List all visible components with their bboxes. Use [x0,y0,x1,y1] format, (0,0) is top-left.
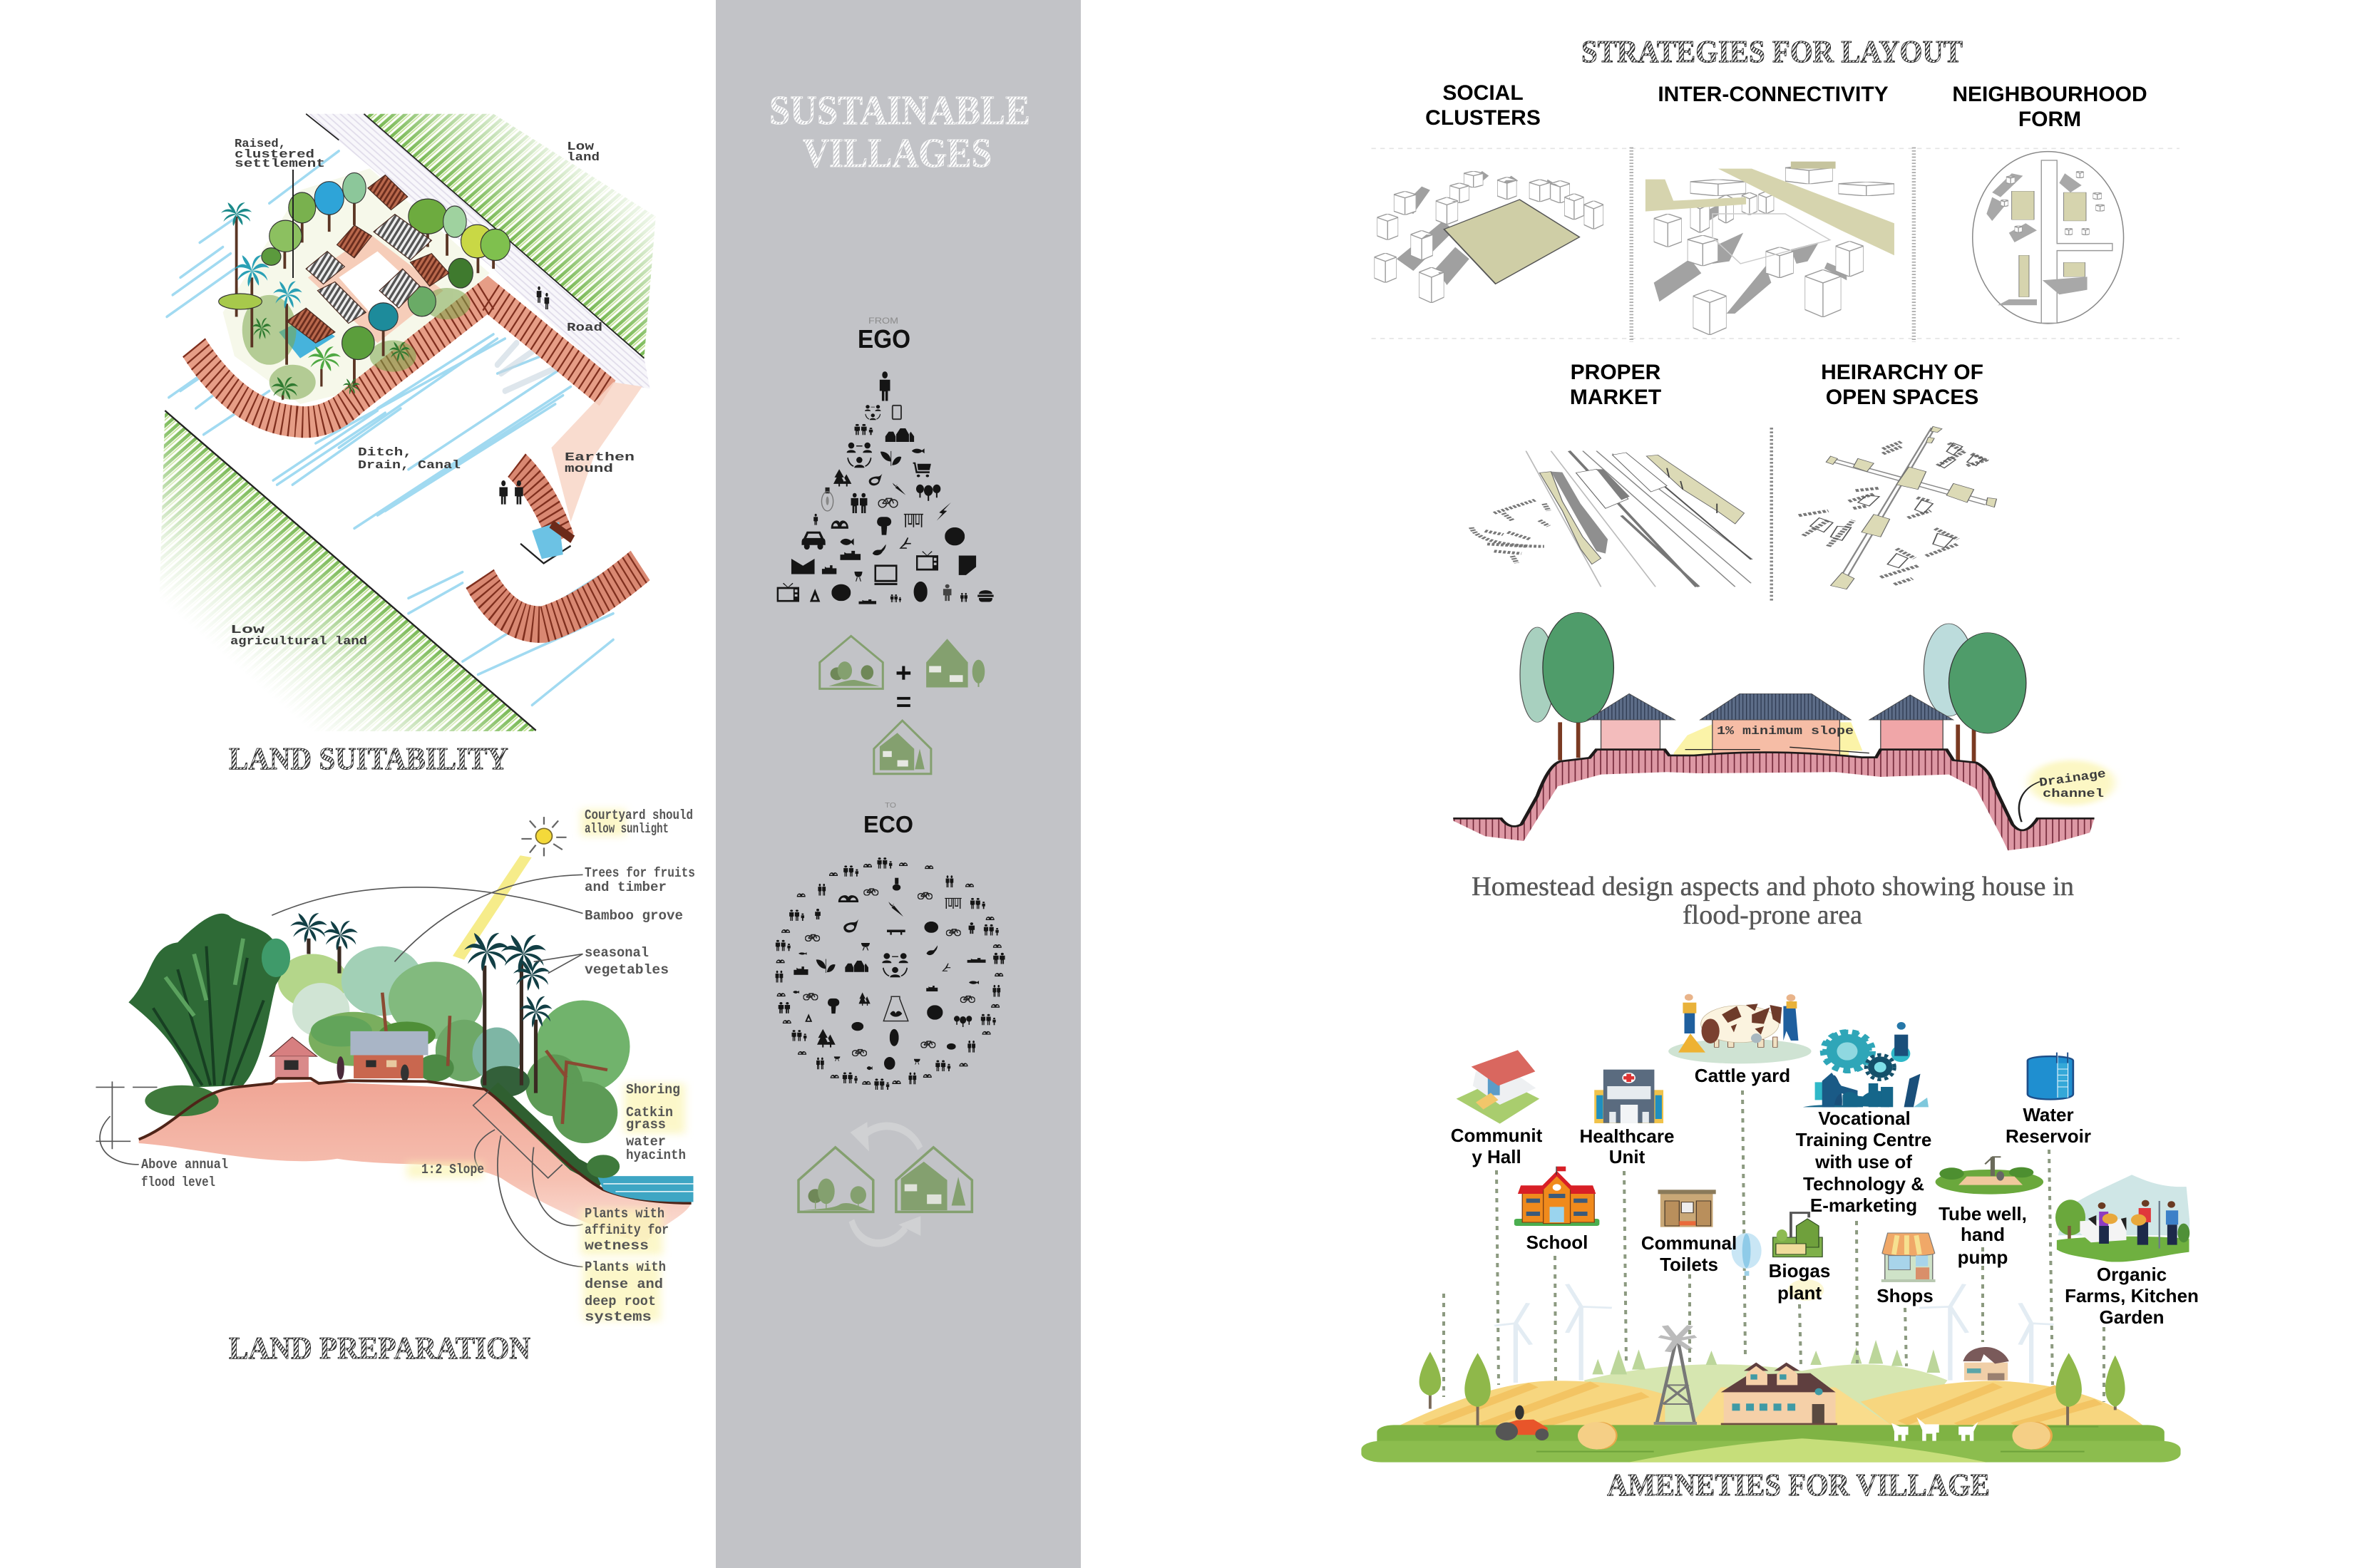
huts [269,1031,428,1081]
labels: land suitability annotations: Ditch, [358,446,412,460]
earth embankment [194,295,607,422]
labels: land preparation annotations: water [626,1134,666,1150]
caption: homestead design [1472,872,2074,930]
diagram: open spaces [1799,426,1996,589]
distant trees [278,947,630,1180]
illustration: layout strategy diagrams [1372,148,2179,342]
labels: land preparation annotations: Above annual [141,1157,228,1172]
houses [1587,693,1953,755]
labels: amenities: E-marketing [1810,1195,1917,1216]
icon: tube well [1936,1157,2043,1195]
sun [521,817,567,856]
heading: proper market: MARKET [1570,386,1661,409]
labels: amenities: Organic [2097,1264,2167,1285]
meadow [1361,1425,2181,1463]
people [499,287,549,505]
labels: land suitability annotations: Drain, Canal [358,459,461,473]
labels: land preparation annotations: and timber [585,880,667,895]
labels: land preparation annotations: dense and [585,1276,663,1292]
heading: to eco: ECO [863,811,913,837]
icon: balloon [1732,1233,1762,1276]
houses [287,175,449,343]
labels: land suitability annotations: mound [565,463,613,476]
icon: two green houses with cycle arrows [799,1122,972,1243]
icon: gear left [1803,1032,1889,1107]
labels: amenities: y Hall [1472,1146,1521,1167]
icon: healthcare unit [1594,1070,1663,1123]
small hut icons ring [776,862,1003,1085]
barn [1963,1347,2009,1381]
icon: community hall [1457,1050,1539,1124]
labels: land suitability annotations: Low [230,624,265,637]
labels: homestead annotations: 1% minimum slope [1717,725,1854,738]
labels: land preparation annotations: seasonal [585,945,649,961]
illustration: market and open spaces diagrams [1472,426,1996,602]
palms [290,913,552,1093]
icon: built house [926,639,985,687]
hay bales [1578,1422,2053,1450]
heading: sustainable villages: VILLAGES [803,130,992,176]
labels: amenities: Shops [1876,1285,1934,1306]
icon: green house nature plus built house equals eco house [820,636,985,774]
labels: land preparation annotations: systems [585,1309,652,1325]
heading: neighbourhood form [1952,83,2147,131]
labels: amenities: Reservoir [2006,1125,2091,1147]
labels: amenities: Healthcare [1580,1125,1674,1147]
illustration: homestead flood section [1453,612,2115,850]
labels: amenities: hand [1961,1224,2005,1245]
chart: eco circle of icons [776,857,1005,1090]
icon: built house [896,1147,972,1212]
heading: proper market: PROPER [1571,361,1661,384]
village undergrowth [242,288,471,400]
grey centre panel [716,0,1081,1568]
labels: amenities: Farms, Kitchen [2065,1285,2199,1306]
labels: land preparation annotations [141,808,695,1325]
pair icons [776,875,1005,1084]
pond [279,316,335,359]
diagram: inter-connectivity [1645,162,1894,335]
drainage callout [2019,760,2115,822]
labels: amenities: plant [1777,1282,1822,1304]
labels: land preparation annotations: Bamboo grove [585,908,683,924]
labels: amenities: Water [2023,1104,2074,1125]
plus and equals signs [897,666,910,707]
icons: amenities left half [1457,994,1889,1301]
icon: school [1514,1167,1599,1226]
labels: land suitability annotations: Road [567,321,602,335]
blurred highlight [1788,1279,1824,1301]
village trees [219,172,510,386]
ground with hatching [1453,750,2095,850]
heading: social clusters [1425,81,1541,130]
labels: amenities: Training Centre [1796,1129,1931,1150]
icon: shop [1881,1233,1936,1282]
goats [1891,1417,1978,1441]
field hills [1400,1381,2143,1425]
ground outline [139,1078,692,1203]
icon: water reservoir [2028,1053,2073,1099]
small trees [1592,1340,1940,1374]
labels: homestead annotations: Drainage [2038,768,2107,790]
heading: strategies for layout: STRATEGIES FOR LAYOUT [1581,34,1963,69]
labels: land suitability annotations: agricultural land [230,635,367,649]
labels: amenities: Communit [1451,1125,1543,1146]
heading: amenities for village: AMENETIES FOR VILLAGE [1607,1468,1990,1502]
labels: amenities: with use of [1814,1151,1912,1172]
labels: amenities: Technology & [1803,1173,1924,1195]
icon: nature house [820,636,883,688]
heading: from ego: FROM [868,316,898,326]
caption: homestead design: Homestead design aspects and photo showing house in [1472,872,2074,902]
illustration: land preparation sketch [96,809,693,1321]
cycle arrows [851,1122,920,1243]
labels: land suitability annotations: land [567,151,600,165]
labels: land preparation annotations: flood level [141,1175,215,1190]
labels: amenities: Toilets [1660,1254,1718,1275]
labels: land preparation annotations: grass [626,1117,666,1133]
diagram: social clusters [1374,171,1603,303]
labels: land preparation annotations: vegetables [585,962,669,978]
main house [1721,1363,1837,1425]
slope arrows [1685,747,1869,753]
heading: inter-connectivity: INTER-CONNECTIVITY [1658,83,1889,106]
labels: land suitability annotations: clustered [235,148,314,162]
labels: land preparation annotations: Shoring [626,1082,680,1098]
tractor [1496,1405,1549,1440]
labels: land preparation annotations: Trees for fruits [585,865,695,881]
heading: sustainable villages [769,87,1030,176]
labels: land preparation annotations: Plants with [585,1206,664,1222]
labels: amenities: pump [1958,1247,2008,1268]
bamboo grove [128,914,290,1116]
icon: organic farm [2055,1175,2189,1262]
illustration: village landscape [1361,1284,2181,1463]
labels: amenities: Cattle yard [1695,1065,1790,1086]
caption: homestead design: flood-prone area [1683,900,1862,930]
icon: nature house [799,1147,873,1212]
labels: land suitability annotations: Low [567,140,595,154]
labels: amenities: Garden [2099,1306,2165,1328]
dotted frame [1372,148,2179,339]
lower green field [159,411,536,731]
icon: combined eco house [874,721,931,774]
highlight [1674,722,1862,755]
yellow highlights [407,809,685,1321]
bike icons [803,889,975,1056]
labels: land suitability annotations: Earthen [565,451,635,465]
labels: land suitability annotations: settlement [235,158,325,171]
icons: amenities right half [1822,1022,2189,1282]
heading: sustainable villages: SUSTAINABLE [769,87,1030,133]
heading: land preparation: LAND PREPARATION [229,1331,530,1366]
illustration: land suitability sketch [159,114,656,731]
sunlight beam [453,855,532,960]
family icons ring [776,857,999,1090]
windmill [1654,1326,1697,1425]
palms [221,202,411,401]
labels: land preparation annotations: hyacinth [626,1147,686,1163]
heading: neighbourhood form: NEIGHBOURHOOD [1952,83,2147,106]
dotted connector lines [1444,1090,2104,1402]
trees [1520,612,2026,763]
second embankment and salmon mound [480,382,642,624]
heading: social clusters: SOCIAL [1442,81,1524,105]
labels: land preparation annotations: affinity for [585,1222,669,1238]
labels: land preparation annotations: 1:2 Slope [421,1162,484,1177]
labels: amenities: Communal [1641,1232,1737,1254]
icon: cattle yard [1668,994,1812,1063]
labels: land preparation annotations: wetness [585,1238,649,1254]
labels: amenities: Tube well, [1939,1203,2027,1224]
heading: neighbourhood form: FORM [2018,108,2081,131]
raised settlement platform [223,168,490,404]
labels: amenities [1451,1065,2199,1328]
labels: land suitability annotations: Raised, [235,138,286,151]
labels: amenities: School [1526,1232,1588,1253]
wind turbines [1494,1284,2053,1383]
icon: vocational gears [1822,1022,1929,1107]
labels: amenities: Unit [1609,1146,1645,1167]
blue ditch water strokes [167,151,613,705]
diagram: neighbourhood form [1973,152,2124,324]
labels: land suitability annotations [230,138,635,649]
heading: from ego: EGO [858,324,910,354]
far hills [1584,1364,1947,1425]
labels: land preparation annotations: deep root [585,1294,656,1309]
labels: amenities: Biogas [1769,1260,1830,1281]
icon: biogas plant [1773,1213,1822,1257]
heading: to eco: TO [885,802,896,810]
labels: land preparation annotations: Plants with [585,1259,666,1275]
heading: hierarchy of open spaces: HEIRARCHY OF [1821,361,1983,384]
heading: land suitability: LAND SUITABILITY [229,741,508,776]
diagram: proper market [1472,451,1752,587]
labels: land preparation annotations: allow sunlight [585,821,669,837]
labels: land preparation annotations: Courtyard should [585,808,693,823]
labels: land preparation annotations: Catkin [626,1105,673,1120]
chart: ego pyramid of icons [777,371,994,604]
upper green field [364,114,656,359]
heading: proper market [1570,361,1661,409]
labels: homestead annotations [1717,725,2107,801]
courtyard [308,234,443,343]
heading: social clusters: CLUSTERS [1425,106,1541,130]
heading: hierarchy of open spaces [1821,361,1983,409]
slope diagram and arrows [96,875,583,1267]
labels: amenities: Vocational [1818,1108,1911,1129]
heading: hierarchy of open spaces: OPEN SPACES [1826,386,1978,409]
road [306,114,650,388]
labels: homestead annotations: channel [2043,788,2104,801]
icon: communal toilets [1658,1190,1716,1227]
central icons [793,878,986,1070]
earth mound [139,1081,692,1244]
water [587,1155,693,1202]
large trees [1419,1352,2125,1425]
